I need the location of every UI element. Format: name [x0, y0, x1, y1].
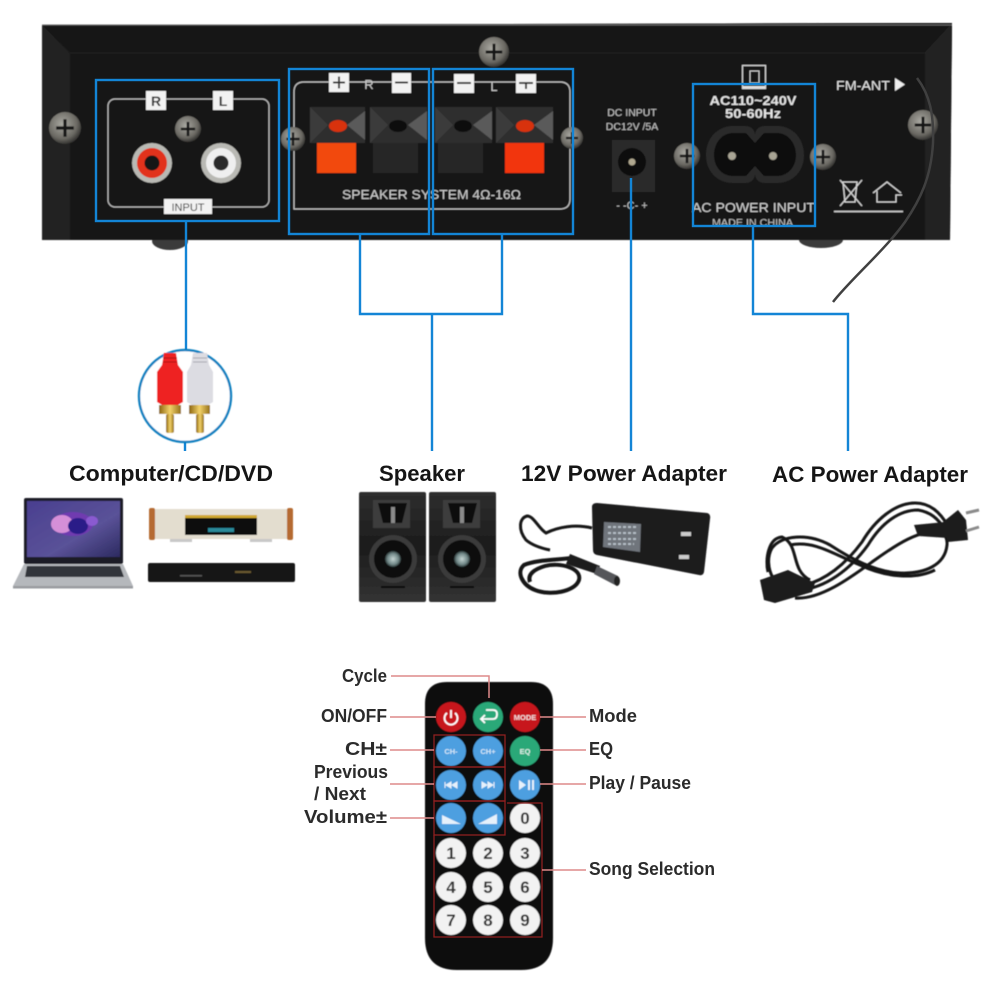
icon: bookshelf speakers: [359, 492, 496, 602]
AC power inlet: 50-60Hz: [725, 106, 782, 121]
DC input socket: - -C- +: [616, 200, 648, 212]
input section: R: [151, 93, 161, 109]
remote labels: [304, 665, 715, 879]
speaker terminals: [294, 73, 570, 209]
speaker terminals: SPEAKER SYSTEM 4Ω-16Ω: [342, 188, 521, 202]
remote labels: ON/OFF: [321, 705, 387, 726]
play and pause button: [510, 770, 540, 800]
number buttons: 4: [446, 878, 456, 897]
remote labels: Song Selection: [589, 858, 715, 879]
number buttons: 8: [483, 911, 493, 930]
amplifier rear panel: [42, 23, 952, 250]
remote labels: Mode: [589, 705, 637, 726]
icon: laptop: [13, 498, 133, 588]
channel buttons: [436, 736, 503, 766]
blue callout boxes and connectors: [96, 69, 848, 451]
FM antenna label: [836, 78, 905, 93]
mode button: [510, 702, 540, 732]
remote body: [425, 682, 553, 970]
number buttons: 2: [483, 844, 493, 863]
icon: 12V power adapter: [520, 503, 710, 593]
remote group outlines: [434, 735, 542, 937]
remote labels: Play / Pause: [589, 772, 691, 793]
channel buttons: CH-: [444, 747, 458, 756]
AC power inlet: AC110~240V: [710, 93, 797, 108]
previous and next buttons: [436, 770, 503, 800]
number buttons: 0: [520, 809, 530, 828]
mode button: MODE: [514, 713, 536, 722]
RCA plug callout: [139, 350, 231, 442]
heading: AC Power Adapter: AC Power Adapter: [772, 462, 968, 487]
remote labels: Previous: [314, 761, 388, 782]
power button: [436, 702, 466, 732]
cycle button: [473, 702, 503, 732]
AC power inlet: AC POWER INPUT: [692, 200, 815, 215]
input section: [108, 91, 269, 214]
number buttons: 5: [483, 878, 493, 897]
remote labels: Cycle: [342, 665, 387, 686]
FM antenna label: FM-ANT: [836, 79, 890, 93]
remote labels: Volume±: [304, 806, 387, 827]
number buttons: 9: [520, 911, 530, 930]
icon: AC power cord: [760, 503, 979, 603]
remote labels: / Next: [314, 783, 366, 804]
amplifier chassis: [42, 23, 952, 240]
number buttons: [436, 803, 540, 935]
DC input socket: DC INPUT: [607, 107, 657, 119]
icon: DVD player: [148, 563, 295, 582]
left speaker: [359, 492, 426, 602]
input section: INPUT: [172, 202, 205, 214]
input section: L: [219, 93, 228, 109]
heading: Computer/CD/DVD: Computer/CD/DVD: [69, 461, 273, 486]
remote control: [425, 682, 553, 970]
number buttons: 7: [446, 911, 456, 930]
safety symbols: [834, 180, 903, 212]
DC input socket: DC12V /5A: [606, 121, 658, 133]
remote labels: EQ: [589, 738, 613, 759]
DC input socket: [606, 107, 658, 212]
right speaker: [429, 492, 496, 602]
EQ button: EQ: [520, 747, 531, 756]
AC power inlet: MADE IN CHINA: [712, 217, 793, 229]
channel buttons: CH+: [480, 747, 496, 756]
remote labels: CH±: [345, 738, 387, 759]
heading: 12V Power Adapter: 12V Power Adapter: [521, 461, 727, 486]
number buttons: 6: [520, 878, 530, 897]
icon: CD player: [149, 508, 293, 542]
number buttons: 3: [520, 844, 530, 863]
heading: Speaker: Speaker: [379, 461, 465, 486]
panel screws: [49, 37, 938, 170]
speaker terminals: R: [364, 77, 374, 92]
EQ button: [510, 736, 540, 766]
rubber feet: [152, 232, 843, 250]
AC power inlet: [692, 66, 815, 229]
antenna cable: [833, 78, 933, 302]
speaker terminals: L: [490, 79, 498, 94]
remote leader lines: [390, 676, 586, 870]
number buttons: 1: [446, 844, 456, 863]
volume buttons: [436, 803, 503, 833]
